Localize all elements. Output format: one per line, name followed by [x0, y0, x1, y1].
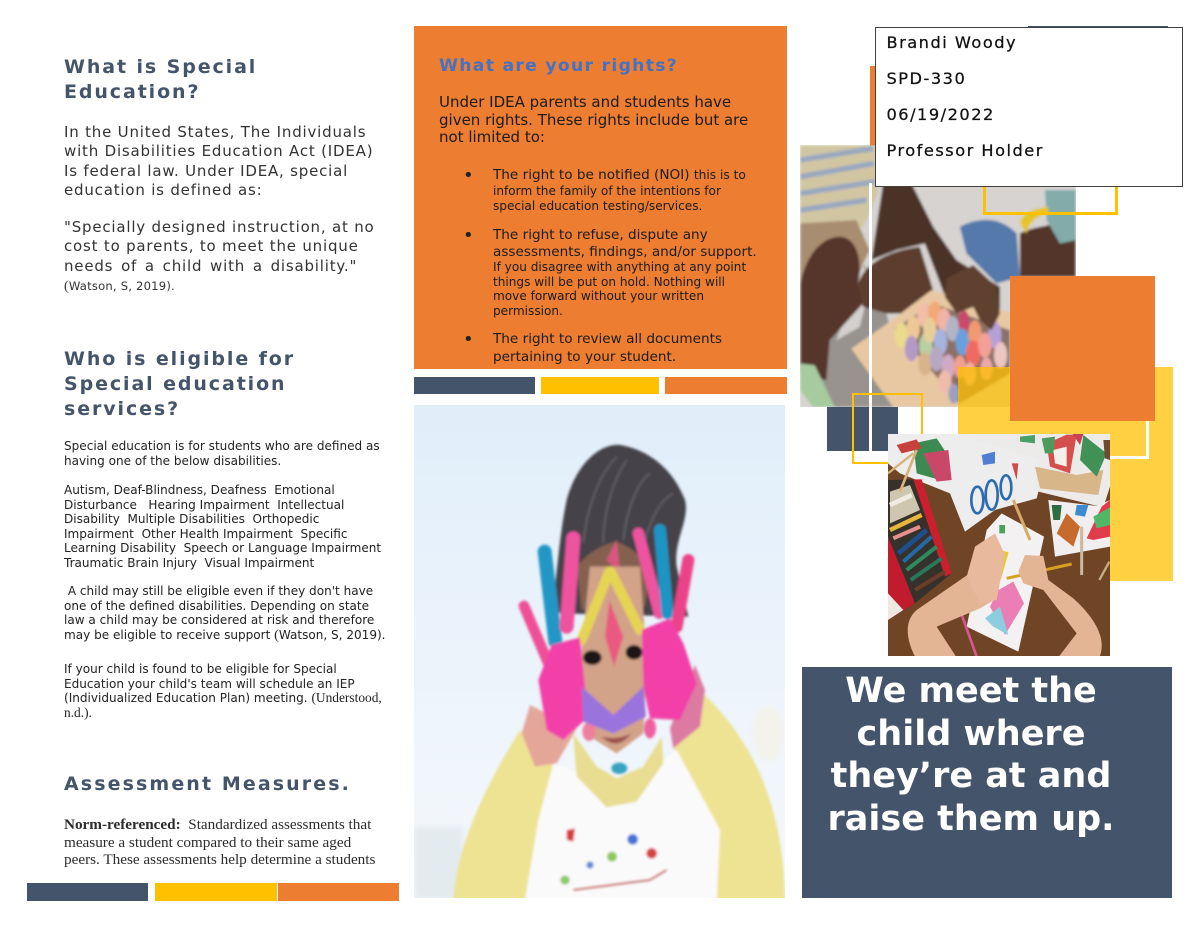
photo: child colouring [888, 434, 1110, 656]
text: list of disabilities: Learning Disability Speech or Language Impairment [64, 541, 381, 555]
text: idea definition: education is defined as: [64, 181, 262, 199]
text: list of disabilities: Autism, Deaf-Blindness, Deafness Emotional [64, 483, 335, 497]
text: idea definition: with Disabilities Education Act (IDEA) [64, 142, 373, 160]
text: slogan [828, 671, 1114, 838]
text: rights intro: not limited to: [439, 128, 545, 146]
text: eligibility intro: Special education is for students who are defined as [64, 439, 380, 453]
text: quote: (Watson, S, 2019). [64, 279, 175, 294]
heading: what is special education: Education? [64, 81, 200, 103]
text: idea definition [64, 123, 373, 199]
text: eligibility intro: having one of the below disabilities. [64, 454, 281, 468]
text: at risk note: may be eligible to receive support (Watson, S, 2019). [64, 628, 386, 642]
text: list of disabilities [64, 483, 381, 570]
bullet: right to review: The right to review all documents [493, 331, 722, 347]
heading: what is special education [64, 56, 257, 103]
heading: who is eligible [64, 348, 295, 420]
text: norm-referenced: measure a student compared to their same aged [64, 834, 351, 850]
text: norm-referenced: peers. These assessments help determine a students [64, 851, 375, 868]
text: norm-referenced: Norm-referenced: Standardized assessments that [64, 816, 371, 833]
text: list of disabilities: Disability Multiple Disabilities Orthopedic [64, 512, 319, 526]
panel: slogan [802, 667, 1172, 898]
decoration: translucent yellow square [958, 367, 1173, 581]
heading: who is eligible: Special education [64, 373, 286, 395]
text: iep meeting: Education your child's team will schedule an IEP [64, 676, 355, 690]
text: author lines [886, 32, 1044, 160]
bullet: right to refuse [463, 225, 757, 318]
text: iep meeting: If your child is found to be eligible for Special [64, 662, 337, 676]
decoration: yellow outline frame top [983, 120, 1118, 215]
heading: assessment measures: Assessment Measures. [64, 773, 351, 795]
text: author lines: SPD-330 [886, 68, 966, 88]
text: at risk note: law a child may be considered at risk and therefore [64, 613, 374, 627]
text: quote: "Specially designed instruction, at no [64, 218, 375, 236]
text: at risk note: one of the defined disabilities. Depending on state [64, 598, 369, 612]
text: list of disabilities: Disturbance Hearing Impairment Intellectual [64, 498, 344, 512]
bullet: right to be notified [463, 165, 746, 212]
decoration: orange sliver [870, 66, 876, 146]
decoration: orange square [1010, 276, 1155, 421]
bullet: right to refuse: assessments, findings, and/or support. [493, 244, 757, 260]
heading: who is eligible: Who is eligible for [64, 348, 295, 370]
decoration: white outline frame [869, 183, 1149, 459]
text: slogan: raise them up. [828, 798, 1114, 838]
text: slogan: We meet the [845, 671, 1097, 711]
text: rights intro: given rights. These rights include but are [439, 110, 748, 128]
bullet: right to review [463, 329, 722, 364]
text: quote: needs of a child with a disability." [64, 257, 357, 275]
text: list of disabilities: Traumatic Brain Injury Visual Impairment [64, 556, 314, 570]
bullet: right to refuse: • [463, 225, 474, 246]
text: author lines: Professor Holder [886, 140, 1044, 160]
text: list of disabilities: Impairment Other Health Impairment Specific [64, 526, 347, 540]
text: quote [64, 218, 375, 294]
bullet: right to be notified: The right to be notified (NOI) this is to [493, 167, 746, 183]
bullet: right to refuse: move forward without your written [493, 289, 704, 303]
decoration: navy square [827, 407, 898, 451]
text: norm-referenced [64, 816, 375, 868]
panel: your rights [414, 26, 787, 369]
text: iep meeting [64, 662, 382, 720]
text: rights intro [439, 93, 748, 146]
photo: child with painted hands [414, 405, 785, 898]
bullet: right to refuse: things will be put on hold. Nothing will [493, 275, 725, 289]
text: author lines: 06/19/2022 [886, 104, 995, 124]
left column footer bars [27, 883, 399, 901]
heading: what is special education: What is Special [64, 56, 257, 78]
bullet: right to be notified: inform the family of the intentions for [493, 184, 721, 198]
text: at risk note: A child may still be eligible even if they don't have [68, 584, 373, 598]
text: quote: cost to parents, to meet the unique [64, 237, 359, 255]
text: slogan: child where [857, 714, 1085, 754]
heading: who is eligible: services? [64, 398, 180, 420]
bullet: right to be notified: special education testing/services. [493, 198, 702, 212]
heading: what are your rights: What are your rights? [439, 56, 678, 76]
text: iep meeting: (Individualized Education Plan) meeting. (Understood, [64, 690, 382, 705]
bullet: right to refuse: permission. [493, 304, 563, 318]
text: slogan: they’re at and [831, 756, 1111, 796]
text: idea definition: In the United States, The Individuals [64, 123, 366, 141]
bullet: right to review: • [463, 329, 474, 350]
bullet: right to review: pertaining to your student. [493, 348, 676, 364]
text: iep meeting: n.d.). [64, 704, 92, 720]
photo: children with chalk [800, 145, 1076, 407]
text: at risk note [64, 584, 386, 642]
bullet: right to be notified: • [463, 165, 474, 186]
text: rights intro: Under IDEA parents and students have [439, 93, 731, 111]
middle column divider bars [414, 377, 787, 394]
text: idea definition: Is federal law. Under IDEA, special [64, 162, 348, 180]
bullet: right to refuse: The right to refuse, dispute any [493, 227, 708, 243]
decoration: yellow outline frame small [852, 393, 923, 464]
bullet: right to refuse: If you disagree with anything at any point [493, 260, 746, 274]
text box: author details [875, 27, 1183, 187]
decoration: top navy strip [1028, 26, 1168, 30]
text: author lines: Brandi Woody [886, 32, 1017, 52]
text: eligibility intro [64, 439, 380, 468]
